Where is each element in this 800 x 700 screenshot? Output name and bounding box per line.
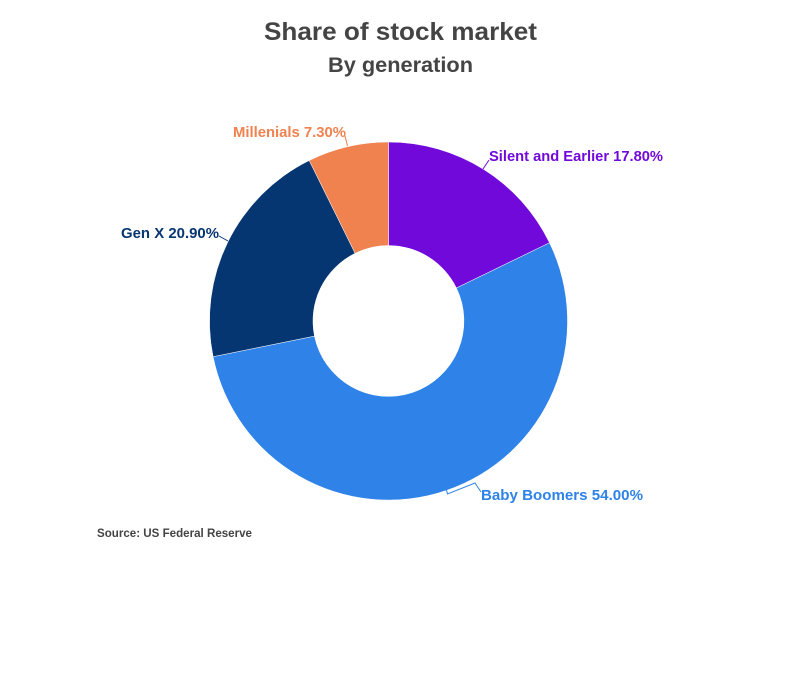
label: Gen X: Gen X 20.90% bbox=[121, 226, 219, 242]
segment: Silent and Earlier bbox=[388, 142, 550, 288]
label: Silent and Earlier: Silent and Earlier 17.80% bbox=[489, 149, 663, 165]
label: Millenials: Millenials 7.30% bbox=[233, 125, 346, 141]
label: Baby Boomers: Baby Boomers 54.00% bbox=[481, 488, 643, 504]
segment: Gen X bbox=[209, 160, 355, 357]
subtitle: By generation bbox=[328, 54, 473, 77]
segment: Millenials bbox=[309, 142, 388, 253]
source note: Source: US Federal Reserve bbox=[97, 528, 252, 540]
title: Share of stock market bbox=[264, 18, 538, 46]
label: Baby Boomers bbox=[446, 483, 643, 504]
segment: Baby Boomers bbox=[213, 243, 568, 500]
donut chart bbox=[209, 142, 568, 500]
